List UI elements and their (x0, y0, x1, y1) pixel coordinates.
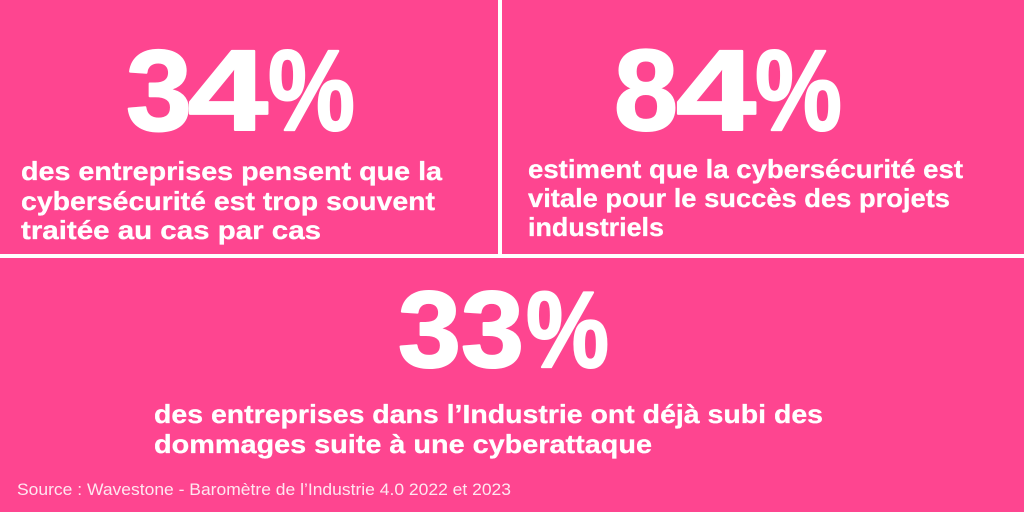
big number: 33%: % (526, 269, 609, 391)
text block: 33% description: des entreprises dans l’Industrie ont déjà subi des (154, 399, 823, 429)
text block: 84% description: estiment que la cybersécurité est (528, 154, 963, 184)
text block: 33% description (154, 399, 823, 459)
big number: 34%: 4 (188, 27, 268, 155)
panel: 33% statistic (154, 269, 823, 459)
big number: 33% (398, 269, 609, 391)
text block: 84% description: industriels (528, 212, 664, 242)
text block: 84% description (528, 154, 963, 242)
big number: 33%: 3 (398, 269, 461, 391)
source note: Source : Wavestone - Baromètre de l’Industrie 4.0 2022 et 2023 (17, 480, 511, 499)
big number: 84%: % (755, 27, 842, 155)
text block: 34% description: des entreprises pensent que la (21, 156, 443, 186)
big number: 84% (614, 27, 842, 155)
big number: 34%: 3 (126, 27, 192, 155)
big number: 33%: 3 (461, 269, 524, 391)
big number: 84%: 4 (676, 27, 756, 155)
panel: 84% statistic (528, 27, 963, 242)
big number: 84%: 8 (614, 27, 678, 155)
text block: 34% description: traitée au cas par cas (21, 215, 321, 245)
text block: 84% description: vitale pour le succès des projets (528, 183, 950, 213)
text block: 34% description: cybersécurité est trop souvent (21, 186, 435, 216)
text block: 34% description (21, 156, 443, 245)
text block: 33% description: dommages suite à une cyberattaque (154, 429, 652, 459)
panel: 34% statistic (21, 27, 443, 245)
big number: 34%: % (268, 27, 355, 155)
big number: 34% (126, 27, 355, 155)
